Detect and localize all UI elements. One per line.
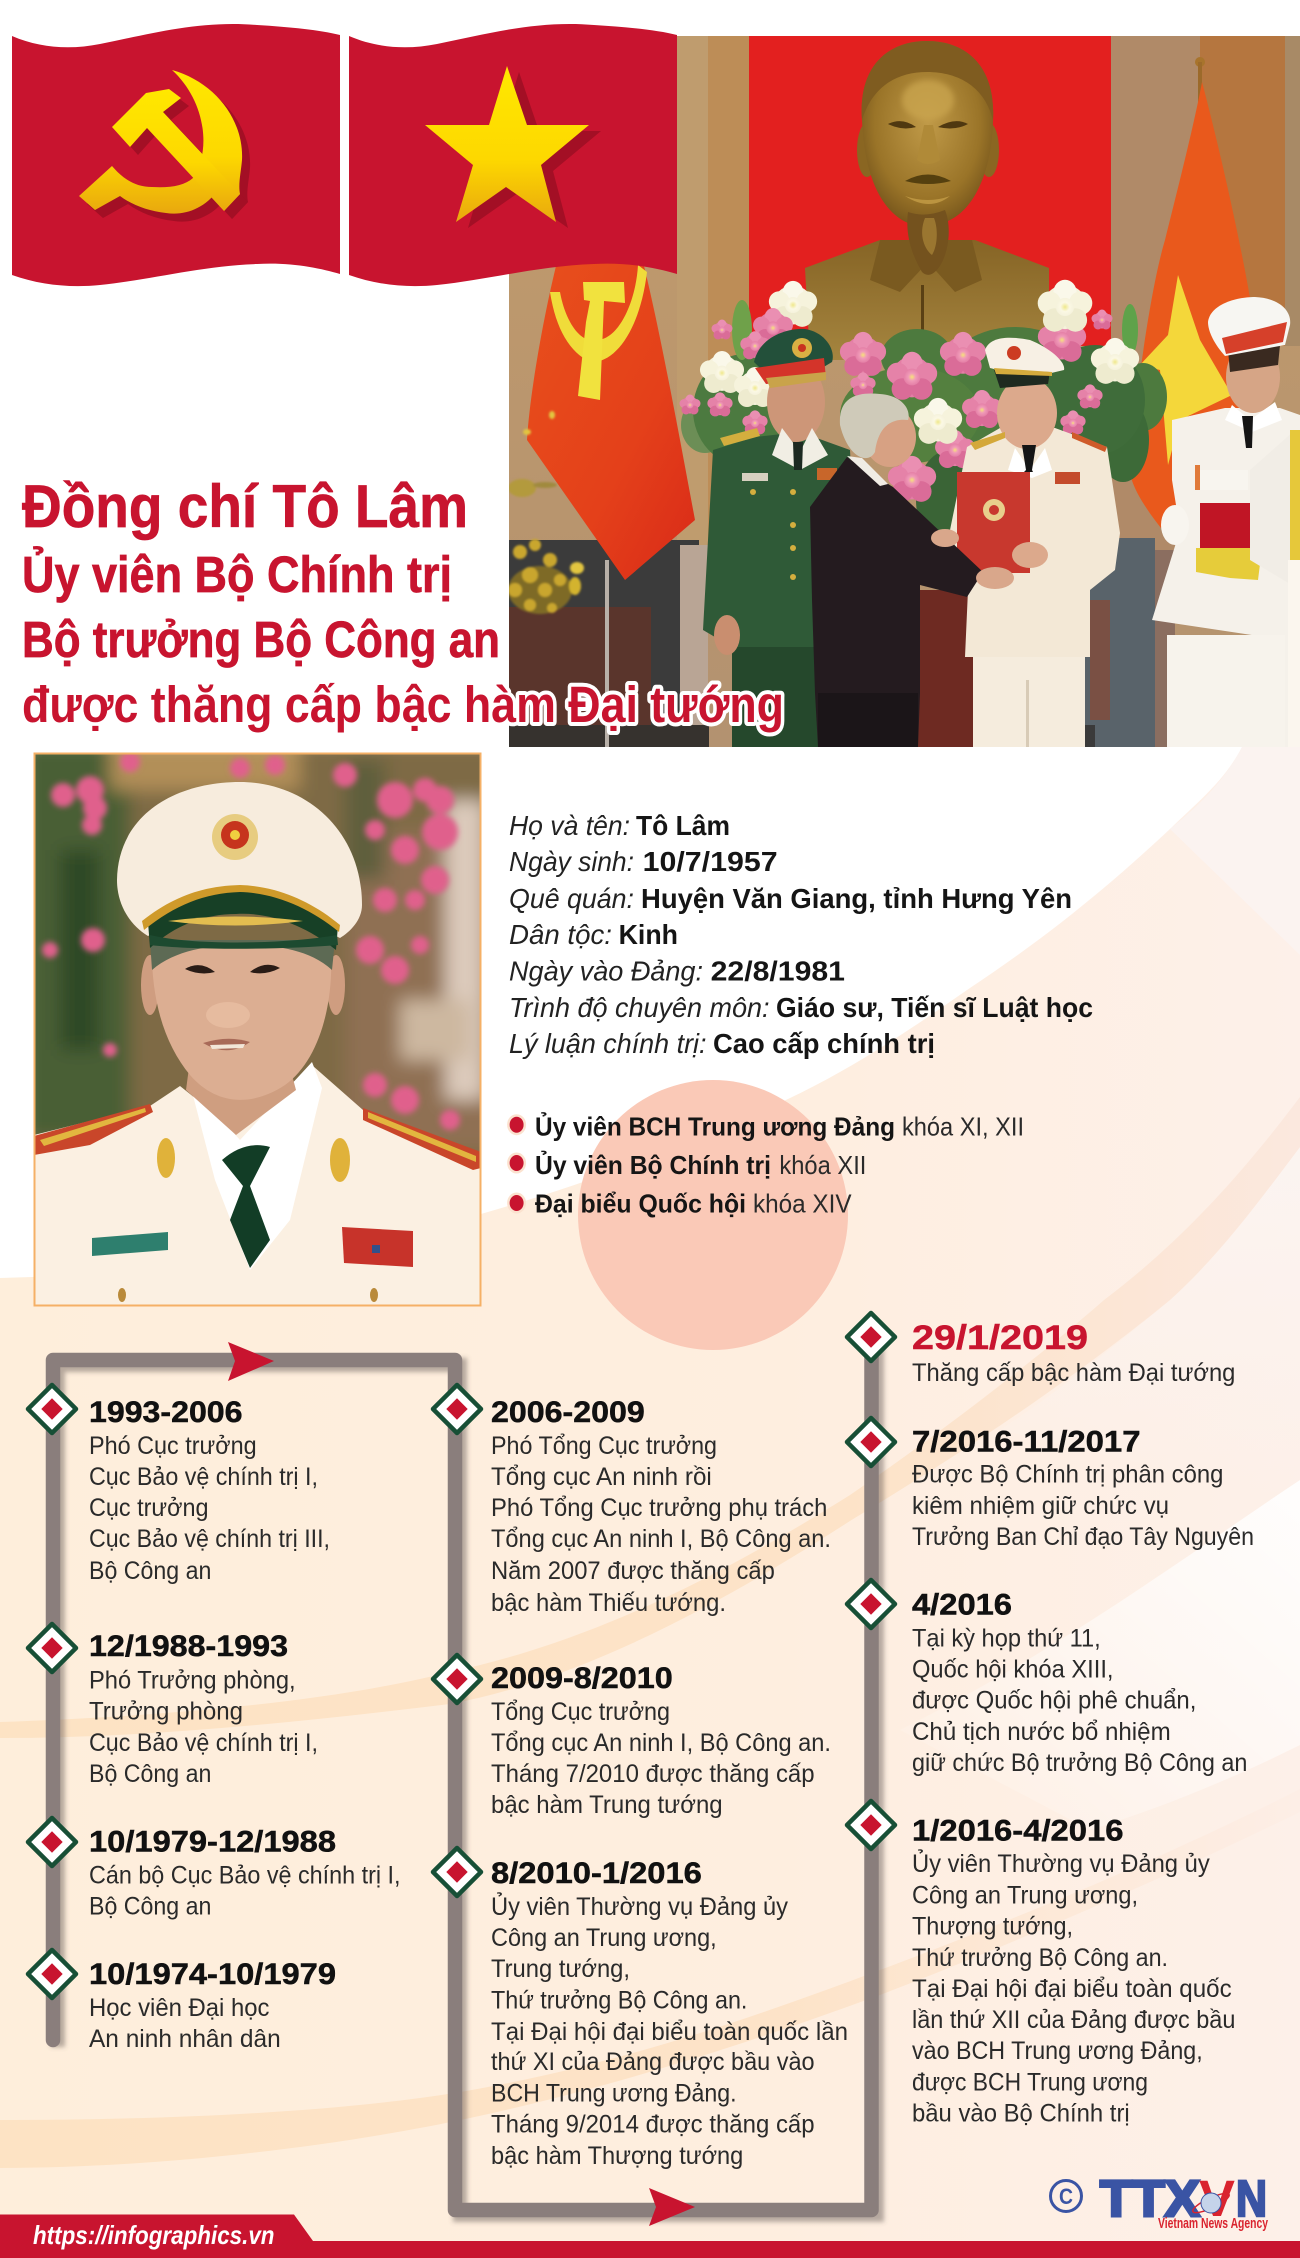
personal details: Ngày sinh: — [509, 846, 634, 877]
portrait tie — [222, 1145, 270, 1268]
portrait jacket — [34, 1066, 481, 1305]
milestone 8/2010-1/2016: Trung tướng, — [491, 1955, 630, 1983]
milestone 1993-2006: 1993-2006 — [89, 1396, 243, 1429]
milestone 10/1979-12/1988 — [28, 1818, 400, 1920]
milestone 2006-2009: Tổng cục An ninh rồi — [491, 1463, 712, 1491]
personal details: 10/7/1957 — [643, 846, 778, 877]
milestone 2006-2009: bậc hàm Thiếu tướng. — [491, 1589, 726, 1617]
milestone 1/2016-4/2016: Thứ trưởng Bộ Công an. — [912, 1944, 1168, 1972]
milestone 2006-2009 — [433, 1385, 831, 1617]
personal details: Quê quán: — [509, 883, 634, 914]
milestone 2009-8/2010: Tổng Cục trưởng — [491, 1698, 670, 1726]
title: Ủy viên Bộ Chính trị — [22, 545, 452, 603]
milestone 12/1988-1993: Phó Trưởng phòng, — [89, 1666, 296, 1694]
milestone 7/2016-11/2017 — [847, 1418, 1254, 1551]
milestone 2009-8/2010: Tháng 7/2010 được thăng cấp — [491, 1760, 815, 1788]
milestone 8/2010-1/2016 — [433, 1848, 848, 2170]
personal details: Ngày vào Đảng: — [509, 955, 703, 986]
personal details: Dân tộc: — [509, 919, 612, 950]
party positions list: Đại biểu Quốc hội — [535, 1188, 746, 1218]
milestone 1/2016-4/2016: Tại Đại hội đại biểu toàn quốc — [912, 1975, 1232, 2003]
milestone 1993-2006: Cục trưởng — [89, 1494, 208, 1522]
TTXVN logo: N — [1236, 2170, 1267, 2227]
party positions list: khóa XI, XII — [902, 1111, 1024, 1141]
yellow plant — [508, 411, 584, 614]
milestone 8/2010-1/2016: Thứ trưởng Bộ Công an. — [491, 1987, 747, 2015]
milestone 2009-8/2010: 2009-8/2010 — [491, 1662, 673, 1695]
personal details: Cao cấp chính trị — [713, 1028, 935, 1059]
milestone 1/2016-4/2016 — [847, 1801, 1235, 2128]
milestone 1/2016-4/2016: 1/2016-4/2016 — [912, 1815, 1124, 1848]
party flag in photo — [527, 262, 695, 580]
hammer and sickle shadow — [87, 78, 250, 222]
marble base — [509, 538, 1175, 747]
milestone 12/1988-1993: 12/1988-1993 — [89, 1630, 288, 1663]
milestone 10/1974-10/1979: Học viên Đại học — [89, 1994, 270, 2022]
milestone 4/2016: Quốc hội khóa XIII, — [912, 1656, 1114, 1684]
portrait cap — [117, 782, 362, 950]
milestone 7/2016-11/2017: Trưởng Ban Chỉ đạo Tây Nguyên — [912, 1523, 1254, 1551]
milestone 10/1974-10/1979 — [28, 1950, 336, 2053]
milestone 1/2016-4/2016: Thượng tướng, — [912, 1913, 1073, 1941]
arrow: top — [228, 1342, 274, 1381]
milestone 4/2016: được Quốc hội phê chuẩn, — [912, 1687, 1196, 1715]
milestone 1/2016-4/2016: được BCH Trung ương — [912, 2068, 1148, 2096]
milestone 4/2016 — [847, 1580, 1247, 1777]
milestone 29/1/2019: Thăng cấp bậc hàm Đại tướng — [912, 1359, 1235, 1387]
party positions list — [507, 1110, 1024, 1218]
name badge — [92, 1232, 168, 1256]
footer bar with url — [0, 2214, 1300, 2258]
epaulets — [34, 1104, 481, 1170]
milestone 2006-2009: Phó Tổng Cục trưởng — [491, 1432, 717, 1460]
star shadow — [437, 72, 601, 228]
milestone 8/2010-1/2016: BCH Trung ương Đảng. — [491, 2080, 737, 2108]
timeline track — [53, 1337, 872, 2210]
hammer and sickle — [79, 70, 242, 214]
milestone 1/2016-4/2016: vào BCH Trung ương Đảng, — [912, 2037, 1203, 2065]
TTXVN logo — [1100, 2170, 1268, 2232]
milestone 4/2016: giữ chức Bộ trưởng Bộ Công an — [912, 1749, 1247, 1777]
arrow: bottom — [649, 2188, 695, 2226]
copyright mark: C — [1059, 2184, 1073, 2209]
portrait of To Lam — [36, 754, 480, 1302]
personal details: 22/8/1981 — [711, 955, 845, 986]
footer bar with url: https://infographics.vn — [33, 2220, 274, 2250]
party positions list: khóa XIV — [753, 1188, 852, 1218]
shirt collar — [190, 1062, 322, 1270]
personal details: Họ và tên: — [509, 810, 630, 841]
milestone 2006-2009: Năm 2007 được thăng cấp — [491, 1557, 775, 1585]
gold star — [425, 66, 589, 222]
party positions list: Ủy viên BCH Trung ương Đảng — [535, 1110, 895, 1141]
milestone 8/2010-1/2016: bậc hàm Thượng tướng — [491, 2142, 743, 2170]
milestone 8/2010-1/2016: Tại Đại hội đại biểu toàn quốc lần — [491, 2018, 848, 2046]
flagpole — [605, 560, 609, 747]
milestone 2009-8/2010: Tổng cục An ninh I, Bộ Công an. — [491, 1729, 831, 1757]
milestone 2006-2009: Phó Tổng Cục trưởng phụ trách — [491, 1494, 827, 1522]
title: Bộ trưởng Bộ Công an — [22, 611, 500, 668]
milestone 10/1974-10/1979: 10/1974-10/1979 — [89, 1958, 336, 1991]
personal details: Lý luận chính trị: — [509, 1028, 706, 1059]
milestone 8/2010-1/2016: Tháng 9/2014 được thăng cấp — [491, 2111, 815, 2139]
pink circle — [578, 1080, 848, 1350]
milestone 1993-2006: Cục Bảo vệ chính trị I, — [89, 1463, 318, 1491]
milestone 1993-2006: Cục Bảo vệ chính trị III, — [89, 1525, 330, 1553]
milestone 10/1974-10/1979: An ninh nhân dân — [89, 2025, 281, 2053]
TTXVN logo: V — [1199, 2170, 1235, 2227]
personal details: Huyện Văn Giang, tỉnh Hưng Yên — [641, 883, 1072, 914]
milestone 12/1988-1993 — [28, 1624, 318, 1788]
milestone 2006-2009: Tổng cục An ninh I, Bộ Công an. — [491, 1525, 831, 1553]
photo wall and column backdrop — [509, 36, 1300, 747]
milestone 7/2016-11/2017: 7/2016-11/2017 — [912, 1426, 1140, 1458]
milestone 8/2010-1/2016: thứ XI của Đảng được bầu vào — [491, 2048, 815, 2076]
personal details: Tô Lâm — [636, 810, 730, 841]
timeline track shadow — [58, 1340, 877, 2215]
bronze bust of Ho Chi Minh — [805, 41, 1049, 360]
milestone 2009-8/2010: bậc hàm Trung tướng — [491, 1791, 723, 1819]
party flag banner — [12, 24, 340, 286]
leader in dark suit — [810, 394, 1014, 747]
milestone 1/2016-4/2016: Công an Trung ương, — [912, 1882, 1138, 1910]
title — [22, 473, 784, 733]
bullet 1 — [507, 1114, 526, 1135]
milestone 1993-2006: Bộ Công an — [89, 1557, 211, 1585]
milestone 10/1979-12/1988: Bộ Công an — [89, 1892, 211, 1920]
personal details: Kinh — [619, 919, 678, 950]
bullet 3 — [507, 1192, 526, 1214]
lotus flower arrangement — [680, 280, 1167, 550]
milestone 2006-2009: 2006-2009 — [491, 1396, 645, 1429]
milestone 8/2010-1/2016: Công an Trung ương, — [491, 1924, 717, 1952]
bullet 2 — [507, 1152, 526, 1174]
milestone 29/1/2019: 29/1/2019 — [912, 1319, 1088, 1357]
milestone 4/2016: 4/2016 — [912, 1589, 1012, 1622]
milestone 7/2016-11/2017: Được Bộ Chính trị phân công — [912, 1461, 1223, 1489]
milestone 7/2016-11/2017: kiêm nhiệm giữ chức vụ — [912, 1492, 1169, 1520]
milestone 1/2016-4/2016: lần thứ XII của Đảng được bầu — [912, 2006, 1235, 2034]
milestone 1993-2006: Phó Cục trưởng — [89, 1432, 257, 1460]
jacket buttons — [118, 1288, 378, 1302]
milestone 1/2016-4/2016: bầu vào Bộ Chính trị — [912, 2100, 1130, 2128]
portrait neck and face — [141, 940, 345, 1135]
ribbons — [342, 1227, 413, 1267]
milestone 10/1979-12/1988: 10/1979-12/1988 — [89, 1826, 336, 1859]
milestone 12/1988-1993: Trưởng phòng — [89, 1698, 243, 1726]
party positions list: Ủy viên Bộ Chính trị — [535, 1149, 771, 1180]
vietnam flag in photo — [1130, 57, 1251, 555]
milestone 4/2016: Tại kỳ họp thứ 11, — [912, 1624, 1101, 1652]
milestone 1/2016-4/2016: Ủy viên Thường vụ Đảng ủy — [912, 1848, 1210, 1878]
personal details: Giáo sư, Tiến sĩ Luật học — [776, 992, 1093, 1023]
milestone 10/1979-12/1988: Cán bộ Cục Bảo vệ chính trị I, — [89, 1861, 400, 1889]
copyright mark — [1050, 2180, 1082, 2212]
minister in white uniform — [950, 338, 1120, 747]
milestone 4/2016: Chủ tịch nước bổ nhiệm — [912, 1718, 1171, 1746]
portrait frame — [34, 754, 480, 1306]
collar insignia — [157, 1138, 350, 1182]
red panel behind bust — [749, 36, 1111, 346]
photo: promotion ceremony under the bust — [508, 36, 1300, 747]
guard of honour — [1152, 297, 1300, 747]
milestone 2009-8/2010 — [433, 1655, 831, 1819]
milestone 12/1988-1993: Cục Bảo vệ chính trị I, — [89, 1729, 318, 1757]
milestone 12/1988-1993: Bộ Công an — [89, 1760, 211, 1788]
vietnam flag banner — [349, 24, 677, 286]
milestone 29/1/2019 — [847, 1313, 1235, 1387]
party positions list: khóa XII — [779, 1150, 866, 1180]
portrait flower background — [36, 754, 480, 1152]
milestone 8/2010-1/2016: Ủy viên Thường vụ Đảng ủy — [491, 1891, 788, 1921]
title: được thăng cấp bậc hàm Đại tướng — [22, 676, 784, 733]
army general — [703, 329, 860, 747]
milestone 1993-2006 — [28, 1385, 330, 1585]
TTXVN logo: TTX — [1100, 2170, 1200, 2227]
milestone 8/2010-1/2016: 8/2010-1/2016 — [491, 1857, 702, 1890]
personal details: Trình độ chuyên môn: — [509, 992, 770, 1023]
personal details — [509, 810, 1093, 1059]
title: Đồng chí Tô Lâm — [22, 473, 468, 540]
